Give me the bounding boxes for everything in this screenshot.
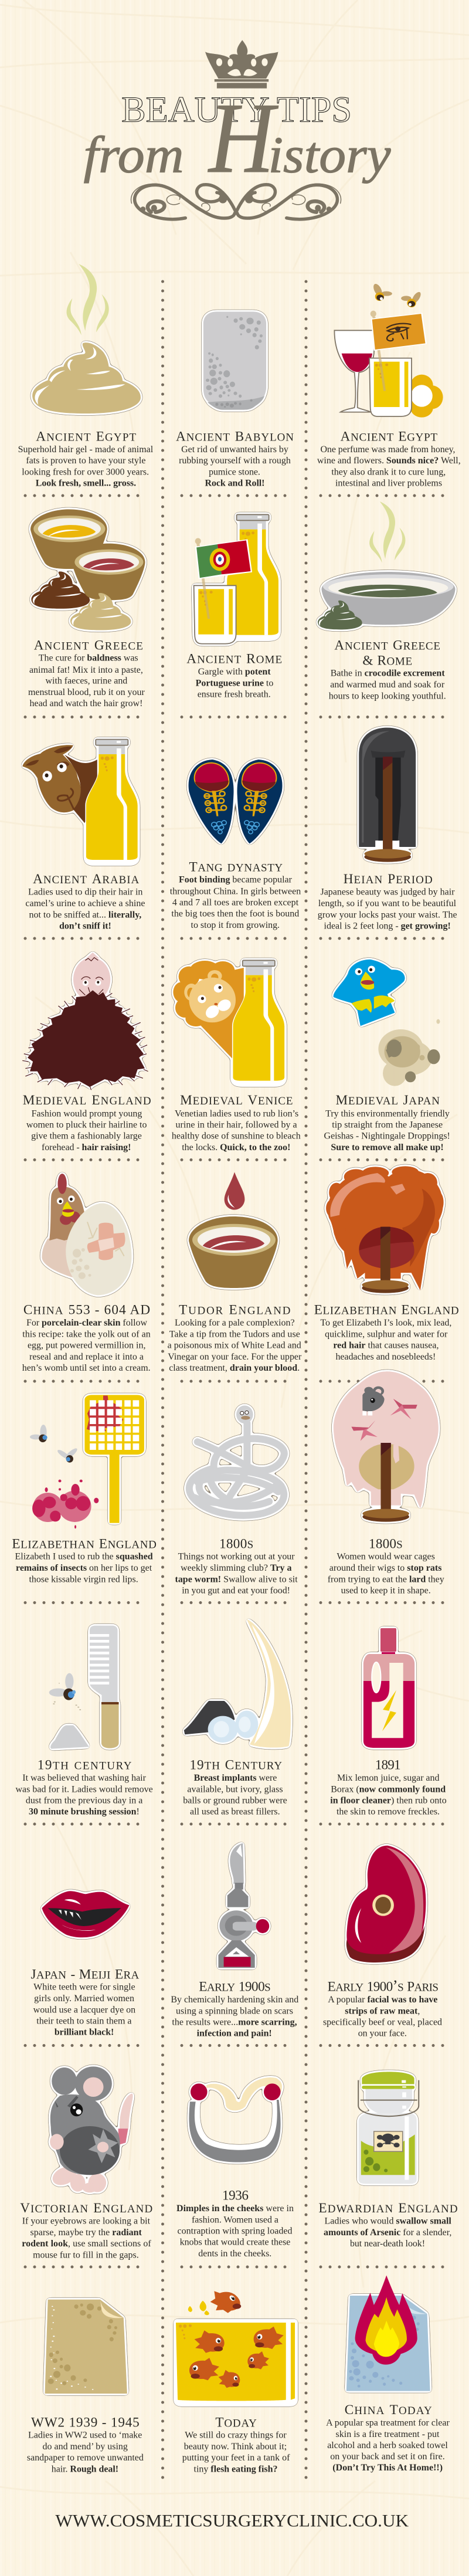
icon: pink wig with rat and bows (334, 1371, 439, 1522)
panel: Early 1900's Paris raw meat facial (323, 1846, 442, 2039)
text block: this recipe: take the yolk out of an (22, 1329, 151, 1339)
panel: Ancient Egypt perfume (317, 283, 461, 489)
text block: We still do crazy things for (185, 2431, 287, 2441)
heading: China 553 - 604 AD (23, 1300, 150, 1318)
text block: balls or ground rubber were (183, 1796, 287, 1806)
heading: Today (215, 2412, 257, 2430)
icon: ivory horn, rubber and glass balls (184, 1619, 291, 1748)
text block (324, 2216, 451, 2249)
panel: Medieval Japan nightingale droppings (324, 960, 450, 1153)
icon: jar details and skull label (358, 2080, 419, 2180)
text block: using a spinning blade on scars (176, 2006, 293, 2016)
text block: Bathe in crocodile excrement (331, 669, 445, 679)
icon: dimple contraption (189, 2077, 282, 2163)
text block: remains of insects on her lips to get (16, 1563, 152, 1573)
icon: sheet of sandpaper (45, 2300, 127, 2394)
text block: available, but ivory, glass (187, 1784, 283, 1794)
icon: flower (408, 375, 443, 418)
heading (334, 636, 440, 668)
heading: 1800s (219, 1534, 253, 1551)
text block: urine in their hair, followed by a (176, 1120, 297, 1130)
text block (33, 1982, 135, 2037)
icon: long black wig on stand (359, 728, 416, 862)
panel: Elizabethan England squashed insects (12, 1395, 157, 1584)
text block: The cure for baldness was (39, 653, 138, 663)
text block: in you gut and eat your food! (182, 1586, 290, 1596)
icon: water and fish (176, 2287, 295, 2401)
text block: with faeces, urine and (45, 676, 127, 686)
panel: 19th century brushing (15, 1626, 153, 1817)
text block (27, 2431, 144, 2474)
text block: forehead - hair raising! (42, 1143, 131, 1153)
text block (182, 2431, 290, 2474)
text block: Breast implants were (194, 1773, 277, 1783)
text block: intestinal and liver problems (335, 479, 442, 489)
text block: fats is proven to have your style (26, 456, 145, 466)
icon: flames (355, 2275, 417, 2365)
vertical and horizontal dotted dividers (25, 282, 443, 2479)
text block (326, 2418, 450, 2473)
text block (179, 445, 291, 489)
panel: 1936 dimple maker (176, 2077, 294, 2259)
icon: soaked towel (346, 2296, 430, 2391)
text block: Looking for a pale complexion? (175, 1318, 295, 1328)
text block: Japanese beauty was judged by hair (320, 887, 455, 897)
text block (15, 1773, 153, 1817)
panel: Tang dynasty foot binding (170, 760, 301, 930)
icon: red wig on stand (326, 1166, 444, 1293)
icon: bound-foot shoes (189, 760, 283, 843)
heading: Ancient Egypt (36, 427, 137, 445)
text block: around their wigs to stop rats (329, 1563, 441, 1573)
heading: Ancient Greece (334, 636, 440, 653)
heading: Early 1900s (199, 1977, 271, 1995)
text block (28, 653, 145, 709)
text block: the big toes then the foot is bound (171, 909, 299, 919)
text block (324, 1109, 450, 1153)
icon: worm face (240, 1411, 250, 1420)
text block (329, 669, 446, 701)
heading: Japan - Meiji Era (31, 1964, 140, 1982)
icon: Portuguese flag on a stick (195, 538, 252, 619)
heading: Ancient Egypt (341, 427, 437, 445)
panel: Ancient Arabia camel urine (22, 740, 145, 931)
heading: Elizabethan England (12, 1534, 157, 1551)
text block: on your back and set it on fire. (330, 2452, 445, 2462)
text block: Borax (now commonly found (331, 1784, 446, 1794)
text block: For porcelain-clear skin follow (26, 1318, 147, 1328)
icon: fish tank (175, 2321, 296, 2405)
text block (26, 1109, 147, 1153)
text block: was bad for it. Ladies would remove (15, 1784, 153, 1794)
text block: Portuguese urine to (196, 678, 273, 688)
panel: Early 1900s spinning blade (171, 1843, 298, 2039)
text block: Rock and Roll! (205, 479, 265, 489)
text block: Dimples in the cheeks were in (176, 2204, 294, 2214)
text block: Women would wear cages (337, 1552, 435, 1562)
icon: Eye of Horus flag (371, 313, 427, 351)
text block: ensure fresh breath. (198, 690, 271, 700)
panel: WW2 sandpaper (27, 2300, 144, 2474)
text block: putting your feet in a tank of (182, 2453, 290, 2463)
text block (168, 1318, 302, 1373)
text block (323, 1995, 442, 2039)
text block: from trying to eat the lard they (328, 1574, 444, 1584)
icon: steam (369, 501, 405, 563)
heading: Medieval England (23, 1090, 151, 1108)
heading: Ancient Arabia (33, 869, 140, 887)
text block: on your face. (358, 2029, 407, 2039)
text block: Look fresh, smell... gross. (36, 479, 136, 489)
heading: from History (83, 83, 391, 194)
text block: Fashion would prompt young (32, 1109, 142, 1118)
text block: contraption with spring loaded (178, 2226, 292, 2236)
text block: Try this environmentally friendly (325, 1109, 450, 1118)
heading: Heian Period (344, 869, 433, 887)
text block: 4 and 7 all toes are broken except (172, 897, 299, 907)
heading: Tudor England (179, 1300, 290, 1318)
text block: Things not working out at your (178, 1552, 295, 1562)
heading: WW2 1939 - 1945 (31, 2415, 140, 2430)
text block: strips of raw meat, (345, 2006, 420, 2016)
text block (18, 445, 154, 489)
text block: amounts of Arsenic for a slender, (324, 2228, 451, 2238)
text block: girls only. Married women (34, 1994, 134, 2004)
text block: give them a fashionably large (31, 1131, 142, 1141)
text block (318, 887, 457, 931)
text block: rodent look, use small sections of (22, 2239, 151, 2249)
heading: 1891 (375, 1758, 401, 1773)
text block: specifically beef or veal, placed (323, 2017, 442, 2027)
icon: wine glass (334, 330, 375, 412)
text block: Elizabeth I used to rub the squashed (15, 1552, 153, 1562)
text block: head and watch the hair grow! (30, 699, 142, 709)
icon: bald-patched mouse (47, 2066, 133, 2192)
heading: from History: from (83, 127, 184, 184)
heading: Medieval Venice (180, 1090, 293, 1108)
icon: ornamental flourish (131, 184, 341, 219)
panel: Ancient Greece and Rome crocodile bath (318, 501, 456, 701)
text block: Mix lemon juice, sugar and (337, 1773, 439, 1783)
icon: raw steak (346, 1846, 426, 1962)
panel: Elizabethan England red hair (314, 1166, 459, 1362)
text block: camel’s urine to achieve a shine (25, 899, 145, 909)
text block (170, 875, 301, 930)
panel: Medieval Venice lion urine (172, 960, 301, 1153)
heading: Tang dynasty (189, 857, 283, 875)
text block: weekly slimming club? Try a (181, 1563, 291, 1573)
text block (22, 1318, 151, 1373)
text block: length, so if you want to be beautiful (318, 899, 457, 909)
text block: By chemically hardening skin and (171, 1995, 298, 2005)
heading: Medieval Japan (335, 1090, 440, 1108)
text block: Get rid of unwanted hairs by (181, 445, 288, 455)
panel: Tudor England blood letting (168, 1172, 302, 1373)
text block (183, 1773, 287, 1817)
text block: Venetian ladies used to rub lion’s (175, 1109, 298, 1118)
text block: dents in the cheeks. (198, 2249, 271, 2259)
text block (176, 2204, 294, 2259)
icon: bowl with crocodile excrement (318, 572, 456, 629)
icon: tape worm (189, 1405, 284, 1516)
icon: blue bird (334, 960, 405, 1026)
icon: dermabrasion machine (218, 1843, 269, 1968)
heading: 1936 (222, 2188, 249, 2204)
text block: would use a lacquer dye on (33, 2005, 135, 2015)
text block: looking fresh for over 3000 years. (22, 467, 149, 477)
icon: comb (50, 1626, 119, 1749)
text block (196, 667, 273, 700)
text block: menstrual blood, rub it on your (28, 687, 145, 697)
text block: It was believed that washing hair (22, 1773, 147, 1783)
text block: hours to keep looking youthful. (329, 691, 446, 701)
icon: lion and bottle (173, 960, 285, 1085)
panel: Ancient Egypt hair gel (18, 264, 154, 489)
text block: quicklime, sulphur and water for (325, 1329, 448, 1339)
icon: cups and mounds (30, 509, 145, 630)
text block: healthy dose of sunshine to bleach (172, 1131, 301, 1141)
heading: from History: istory (269, 127, 391, 184)
text block: sparse, maybe try the radiant (30, 2228, 142, 2238)
text block: ideal is 2 feet long - get growing! (324, 921, 451, 931)
heading: & Rome (362, 650, 412, 668)
icon: hen and bandaged egg (42, 1174, 131, 1295)
heading: Edwardian England (318, 2198, 458, 2216)
text block: the skin to remove freckles. (337, 1807, 440, 1817)
text block (330, 1773, 447, 1817)
text block: brilliant black! (55, 2027, 114, 2037)
heading: China Today (345, 2400, 432, 2418)
text block: the results were...more scarring, (172, 2017, 297, 2027)
heading: from History: H (208, 83, 278, 194)
panel: 1800s tape worm (175, 1405, 298, 1596)
text block: all used as breast fillers. (190, 1807, 280, 1817)
icon: honey glass (369, 358, 412, 416)
text block: hair. Rough deal! (52, 2464, 118, 2474)
heading: Victorian England (20, 2198, 152, 2216)
text block: rubbing yourself with a rough (179, 456, 291, 466)
icon: arsenic jar (359, 2072, 417, 2184)
icon: steam (66, 264, 109, 335)
text block: a poisonous mix of White Lead and (168, 1341, 301, 1351)
icon: wine, honey and flower (334, 283, 443, 418)
text block: Geishas - Nightingale Droppings! (324, 1131, 450, 1141)
text block: A popular spa treatment for clear (326, 2418, 450, 2428)
text block: alcohol and a herb soaked towel (327, 2441, 448, 2450)
text block: White teeth were for single (33, 1982, 135, 1992)
text block: tiny flesh eating fish? (194, 2464, 277, 2474)
footer website address: WWW.COSMETICSURGERYCLINIC.CO.UK (55, 2511, 409, 2530)
panel: 1800s rat cages on wigs (328, 1371, 444, 1596)
heading: 1800s (369, 1534, 403, 1551)
text block: dust from the previous day in a (26, 1796, 142, 1806)
heading: 19th century (38, 1755, 132, 1773)
panel: Ancient Babylon pumice (176, 311, 294, 489)
text block (172, 1109, 301, 1153)
text block: headaches and nosebleeds! (335, 1352, 436, 1362)
icon: camel and bottle (22, 740, 138, 864)
text block: in floor cleaner) then rub onto (330, 1796, 447, 1806)
text block: throughout China. In girls between (170, 886, 301, 896)
text block: To get Elizabeth I’s look, mix lead, (320, 1318, 451, 1328)
icon: blood drop (225, 1172, 244, 1210)
text block: If your eyebrows are looking a bit (22, 2216, 151, 2226)
heading: Elizabethan England (314, 1300, 459, 1318)
text block: the locks. Quick, to the zoo! (182, 1143, 290, 1153)
icon: floor cleaner bottle (363, 1628, 414, 1748)
panel: Today fish pedicure (175, 2287, 296, 2474)
text block (317, 445, 461, 489)
text block: their teeth to stain them a (36, 2016, 131, 2026)
text block: not to be sniffed at... literally, (29, 910, 141, 920)
text block: knobs that would create these (180, 2238, 290, 2248)
title block (83, 40, 391, 219)
text block: egg, put powered vermillion in, (28, 1341, 145, 1351)
icon: hair gel mound (32, 343, 141, 413)
text block: Ladies who would swallow small (325, 2216, 451, 2226)
text block: don’t sniff it! (59, 921, 111, 931)
icon: urine bottle and glass (194, 514, 279, 644)
text block (25, 887, 145, 931)
text block: grow your locks past your waist. The (318, 910, 457, 920)
panel: Medieval England hairline (22, 953, 151, 1153)
panel: Ancient Rome mouthwash (186, 514, 282, 700)
panel: 1891 freckle remover (330, 1628, 447, 1817)
text block: red hair that causes nausea, (333, 1341, 439, 1351)
icon: stick (371, 311, 386, 391)
panel: China today fire treatment (326, 2275, 450, 2473)
text block: One perfume was made from honey, (320, 445, 456, 455)
heading: 19th Century (189, 1755, 282, 1773)
text block: they also drank it to cure lung, (331, 467, 446, 477)
icon: flies and squashed blood (30, 1425, 98, 1528)
text block: Vinegar on your face. For the upper (168, 1352, 302, 1362)
text block: skin is a fire treatment - put (335, 2429, 440, 2439)
text block: do and mend’ by using (42, 2442, 128, 2452)
icon: woman with huge mass of plucked hair (22, 953, 148, 1090)
text block: tip straight from the Japanese (332, 1120, 443, 1130)
icon: fly swatter (84, 1395, 144, 1523)
panel: Ancient Greece baldness cure (28, 509, 145, 709)
panel: Edwardian England arsenic (318, 2072, 458, 2249)
panel: Japan Meiji era black teeth (31, 1891, 140, 2037)
text block: tape worm! Swallow alive to sit (175, 1574, 298, 1584)
text block: animal fat! Mix it into a paste, (29, 665, 143, 675)
heading: Ancient Rome (186, 649, 282, 667)
text block: Take a tip from the Tudors and use (169, 1329, 300, 1339)
text block: sandpaper to remove unwanted (27, 2453, 144, 2463)
icon: crown (205, 40, 278, 89)
heading: Beauty Tips: BEAUTY TIPS (121, 90, 352, 130)
text block: Ladies used to dip their hair in (28, 887, 142, 897)
icon: lips with blackened teeth (42, 1891, 129, 1937)
icon: fly and dust (49, 1673, 81, 1710)
text block: but near-death look! (350, 2239, 425, 2249)
icon: cup of blood (189, 1216, 278, 1288)
text block: used to keep it in shape. (341, 1586, 431, 1596)
text block: Foot binding became popular (179, 875, 293, 884)
text block (328, 1552, 444, 1596)
text block: beauty now. Think about it; (184, 2442, 287, 2452)
text block: infection and pain! (197, 2029, 272, 2039)
text block: hen’s womb until set into a cream. (22, 1363, 151, 1373)
text block: Sure to remove all make up! (331, 1143, 444, 1153)
text block: 30 minute brushing session! (29, 1807, 140, 1817)
text block: fashion. Women used a (192, 2215, 278, 2225)
text block: and warmed mud and soak for (330, 680, 445, 690)
text block: Ladies in WW2 used to ‘make (28, 2431, 142, 2441)
icon: face and hair detail (81, 958, 103, 986)
text block: to stop it from growing. (191, 920, 280, 930)
icon: pumice stone (203, 311, 266, 410)
panel: 19th century breast implants (183, 1619, 291, 1817)
text block (15, 1552, 153, 1584)
text block: Superhold hair gel - made of animal (18, 445, 154, 455)
text block: Gargle with potent (198, 667, 271, 677)
text block (171, 1995, 298, 2039)
text block (22, 2216, 151, 2260)
text block: wine and flowers. Sounds nice? Well, (317, 456, 461, 466)
icon: bees (372, 283, 423, 307)
text block: A popular facial was to have (328, 1995, 437, 2005)
text block: reseal and and replace it into a (29, 1352, 144, 1362)
text block: women to pluck their hairline to (26, 1120, 147, 1130)
heading: Ancient Babylon (176, 427, 294, 445)
text block: mouse fur to fill in the gaps. (33, 2250, 139, 2260)
text block: those kissable virgin red lips. (29, 1574, 138, 1584)
panel: Heian period long hair (318, 728, 457, 931)
heading: Ancient Greece (34, 636, 143, 653)
text block: pumice stone. (209, 467, 260, 477)
text block: (Don’t Try This At Home!!) (332, 2463, 443, 2473)
heading: Early 1900’s Paris (328, 1977, 439, 1995)
text block (320, 1318, 451, 1362)
text block (175, 1552, 298, 1596)
text block: class treatment, drain your blood. (169, 1363, 300, 1373)
icon: droppings stain (378, 1019, 440, 1086)
panel: Victorian England mouse-fur eyebrows (20, 2066, 152, 2260)
panel: China porcelain skin recipe (22, 1174, 151, 1373)
